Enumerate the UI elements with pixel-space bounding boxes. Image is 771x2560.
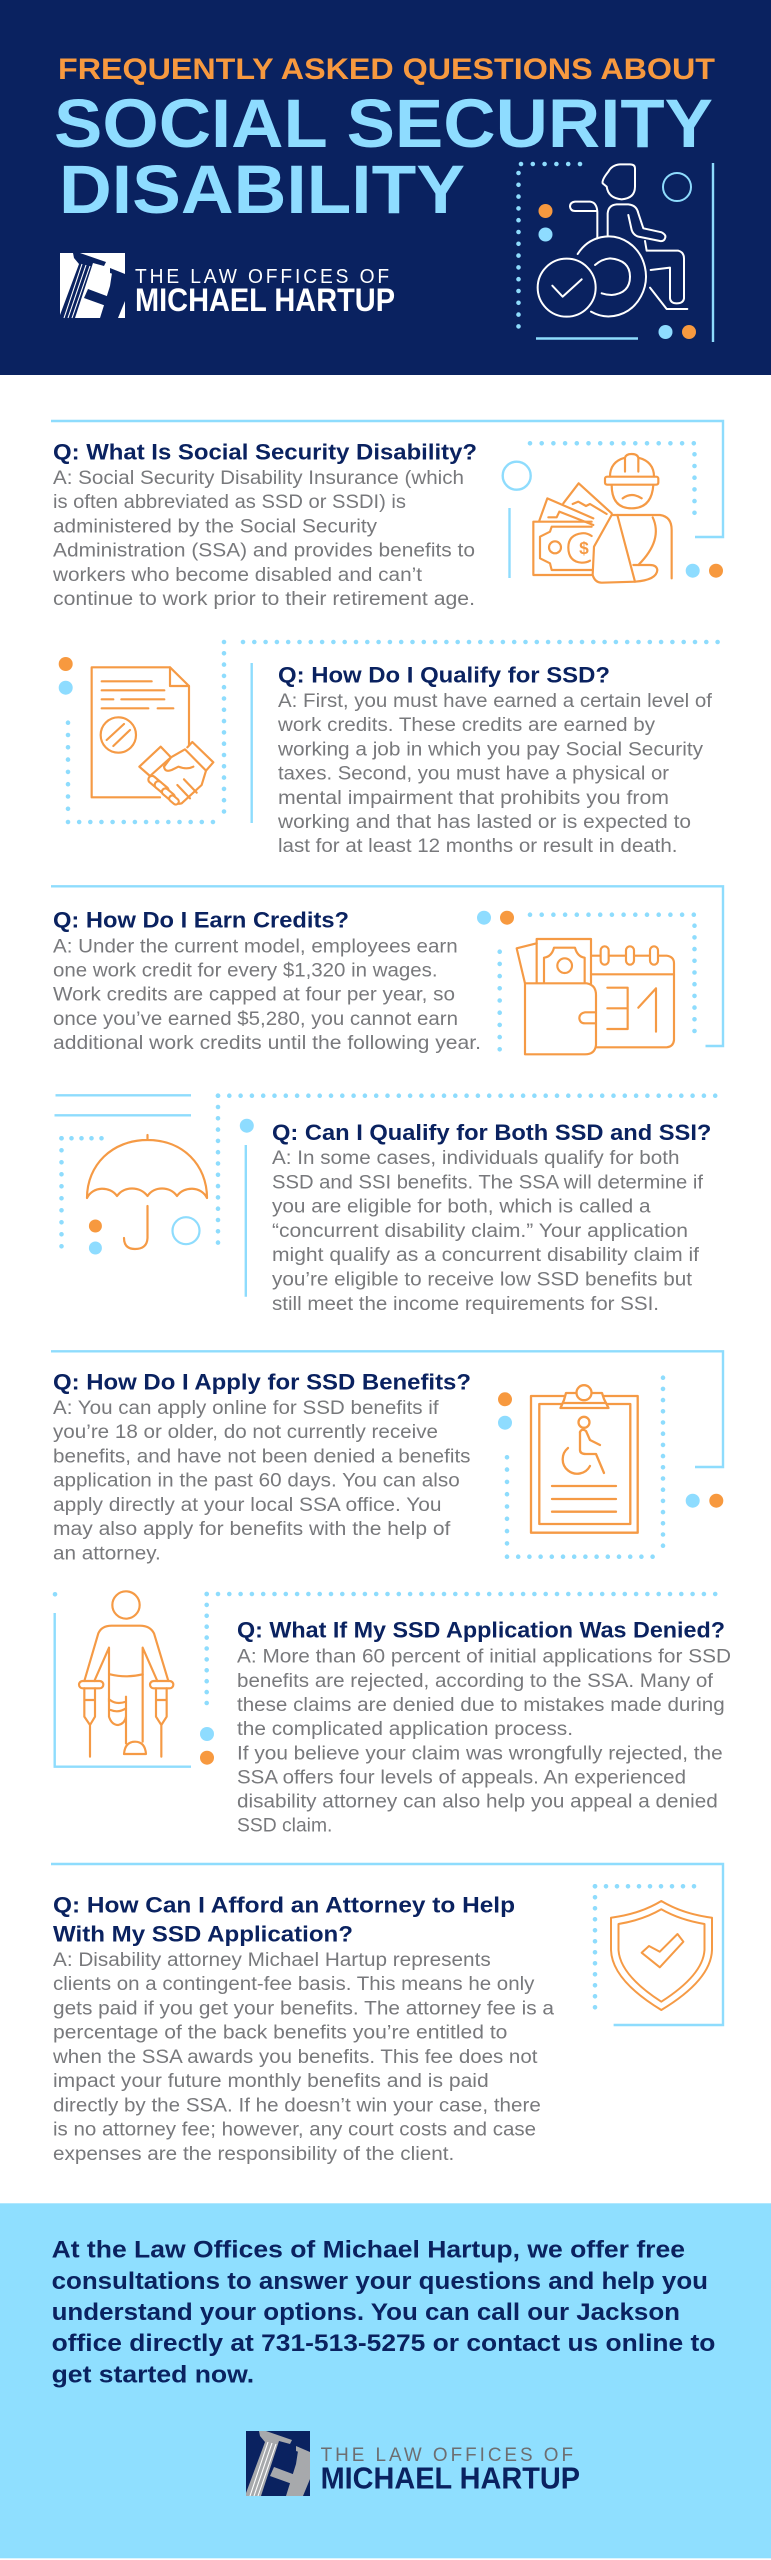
icon: wallet and calendar <box>477 911 694 1054</box>
answer text: A: Disability attorney Michael Hartup represents <box>53 1950 491 1971</box>
panel: call to action <box>0 2203 771 2558</box>
answer text: A: Under the current model, employees earn <box>53 936 458 957</box>
answer text: If you believe your claim was wrongfully rejected, the <box>237 1743 723 1764</box>
answer text: gets paid if you get your benefits. The attorney fee is a <box>53 1998 554 2020</box>
answer text: administered by the Social Security <box>53 516 378 537</box>
title <box>54 85 713 228</box>
answer text: clients on a contingent-fee basis. This means he only <box>53 1974 535 1995</box>
answer text: A: More than 60 percent of initial applications for SSD <box>237 1647 731 1668</box>
answer text: might qualify as a concurrent disability claim if <box>272 1245 700 1266</box>
answer text: additional work credits until the following year. <box>53 1033 481 1054</box>
call to action text <box>52 2237 715 2388</box>
answer text: “concurrent disability claim.” Your application <box>272 1221 688 1242</box>
icon: clipboard with wheelchair form <box>498 1378 723 1557</box>
icon: injured worker with money: $ <box>579 538 589 558</box>
answer text <box>53 1398 470 1564</box>
answer text: these claims are denied due to mistakes made during <box>237 1695 725 1716</box>
panel: SSD and SSI <box>54 1095 723 1315</box>
call to action text: At the Law Offices of Michael Hartup, we offer free <box>52 2237 685 2264</box>
answer text: work credits. These credits are earned by <box>277 715 656 736</box>
panel: application denied <box>53 1591 731 1837</box>
answer text: Work credits are capped at four per year, so <box>53 985 455 1006</box>
icon: document and handshake <box>59 657 213 806</box>
answer text: working a job in which you pay Social Security <box>277 739 704 760</box>
answer text: you are eligible for both, which is called a <box>272 1197 651 1218</box>
panel: how to apply <box>51 1351 723 1564</box>
answer text: workers who become disabled and can’t <box>52 565 423 586</box>
answer text: SSA offers four levels of appeals. An experienced <box>237 1767 686 1788</box>
answer text: apply directly at your local SSA office. You <box>53 1495 442 1516</box>
answer text: mental impairment that prohibits you from <box>278 788 669 809</box>
answer text <box>52 468 475 610</box>
logo: law offices navy <box>246 2431 580 2496</box>
answer text: is often abbreviated as SSD or SSDI) is <box>53 492 406 513</box>
heading: Q: What If My SSD Application Was Denied? <box>237 1617 725 1642</box>
icon: shield with check <box>595 1886 712 2018</box>
answer text: once you’ve earned $5,280, you cannot earn <box>53 1009 458 1030</box>
panel: afford an attorney <box>51 1864 723 2165</box>
panel: header <box>0 0 771 375</box>
call to action text: get started now. <box>52 2361 254 2388</box>
title: SOCIAL SECURITY <box>54 85 713 162</box>
heading: Q: How Can I Afford an Attorney to Help <box>53 1893 515 1918</box>
answer text: A: In some cases, individuals qualify for both <box>272 1148 680 1169</box>
subtitle: FREQUENTLY ASKED QUESTIONS ABOUT <box>58 53 715 86</box>
answer text: A: First, you must have earned a certain level of <box>278 691 713 712</box>
call to action text: understand your options. You can call our Jackson <box>52 2299 680 2326</box>
answer text: is no attorney fee; however, any court costs and case <box>53 2120 536 2141</box>
answer text: one work credit for every $1,320 in wages. <box>53 960 438 982</box>
answer text <box>53 936 481 1054</box>
panel: how to qualify <box>59 642 728 857</box>
heading: Q: Can I Qualify for Both SSD and SSI? <box>272 1120 711 1145</box>
logo: law offices white: THE LAW OFFICES OF <box>135 266 392 288</box>
answer text: benefits are rejected, according to the SSA. Many of <box>237 1671 714 1692</box>
answer text: benefits, and have not been denied a benefits <box>53 1446 470 1467</box>
answer text: may also apply for benefits with the help of <box>53 1519 451 1540</box>
heading: Q: How Do I Apply for SSD Benefits? <box>53 1369 471 1394</box>
icon: wheelchair <box>518 163 713 342</box>
answer text: A: You can apply online for SSD benefits if <box>53 1398 439 1419</box>
answer text <box>237 1647 731 1837</box>
answer text <box>272 1148 704 1315</box>
icon: umbrella <box>62 1135 207 1256</box>
answer text: taxes. Second, you must have a physical or <box>278 764 670 785</box>
heading: Q: How Do I Qualify for SSD? <box>278 663 610 688</box>
call to action text: office directly at 731-513-5275 or contact us online to <box>52 2330 715 2357</box>
answer text: continue to work prior to their retirement age. <box>53 589 475 610</box>
answer text: directly by the SSA. If he doesn’t win your case, there <box>53 2096 541 2116</box>
answer text: working and that has lasted or is expected to <box>277 812 691 833</box>
answer text <box>52 1950 554 2165</box>
logo: law offices white: MICHAEL HARTUP <box>135 282 395 318</box>
answer text: expenses are the responsibility of the client. <box>53 2144 454 2165</box>
answer text: still meet the income requirements for SSI. <box>272 1294 659 1315</box>
answer text: impact your future monthly benefits and is paid <box>53 2071 489 2092</box>
answer text: Administration (SSA) and provides benefits to <box>53 541 475 562</box>
answer text: an attorney. <box>53 1543 161 1564</box>
heading: With My SSD Application? <box>53 1922 353 1947</box>
icon: injured worker with money <box>503 443 723 583</box>
answer text: last for at least 12 months or result in death. <box>278 836 678 857</box>
heading: Q: How Do I Earn Credits? <box>53 908 349 933</box>
logo: law offices navy: THE LAW OFFICES OF <box>321 2445 576 2466</box>
heading: Q: What Is Social Security Disability? <box>53 440 477 464</box>
answer text: SSD claim. <box>237 1816 332 1837</box>
answer text: the complicated application process. <box>237 1719 573 1740</box>
answer text: disability attorney can also help you appeal a denied <box>237 1792 718 1813</box>
icon: person on crutches <box>79 1591 173 1757</box>
answer text: A: Social Security Disability Insurance (which <box>53 468 464 489</box>
logo: law offices navy: MICHAEL HARTUP <box>321 2460 580 2496</box>
answer text: when the SSA awards you benefits. This fee does not <box>52 2047 538 2068</box>
title: DISABILITY <box>59 151 465 228</box>
panel: what is SSD <box>51 421 723 610</box>
answer text: SSD and SSI benefits. The SSA will determine if <box>272 1172 704 1193</box>
answer text: you’re 18 or older, do not currently receive <box>53 1422 438 1443</box>
answer text: application in the past 60 days. You can also <box>53 1471 460 1492</box>
heading <box>53 1893 515 1947</box>
logo: law offices white <box>60 253 395 318</box>
answer text: percentage of the back benefits you’re entitled to <box>53 2023 507 2044</box>
answer text: you’re eligible to receive low SSD benefits but <box>272 1270 693 1290</box>
panel: earn credits <box>51 886 723 1054</box>
call to action text: consultations to answer your questions and help you <box>52 2268 708 2295</box>
answer text <box>277 691 713 857</box>
